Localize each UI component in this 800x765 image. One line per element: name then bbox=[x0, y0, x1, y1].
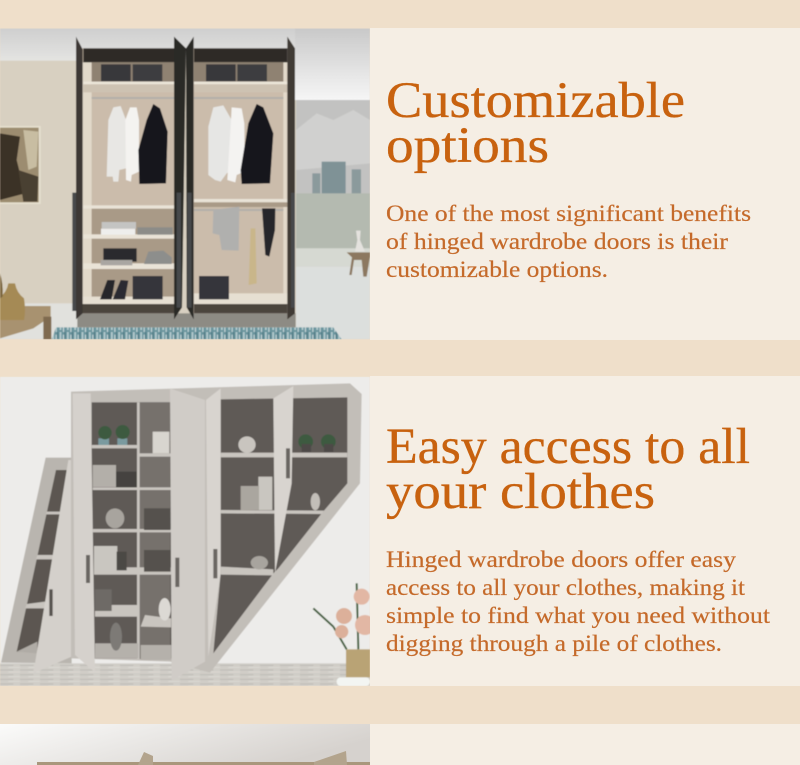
text: easy access description: digging through a pile of clothes. bbox=[386, 631, 722, 656]
heading: Easy access to all your clothes: Easy access to all bbox=[386, 419, 750, 475]
doors bbox=[73, 393, 95, 672]
left slanted cabinet bbox=[1, 458, 72, 663]
painting bbox=[0, 126, 41, 204]
text: easy access description: Hinged wardrobe doors offer easy bbox=[386, 547, 737, 572]
panel: customizable options bbox=[0, 28, 800, 340]
clothes right bbox=[208, 105, 232, 182]
heading: Easy access to all your clothes: your clothes bbox=[386, 464, 655, 520]
rug bbox=[52, 327, 342, 339]
photo: light grey angled under-stairs cabinet bbox=[0, 377, 375, 686]
text: customizable options description bbox=[386, 201, 751, 282]
right unit interior bbox=[193, 48, 287, 313]
text: customizable options description: One of the most significant benefits bbox=[386, 201, 751, 226]
right compartments bbox=[213, 397, 347, 653]
floor bbox=[0, 663, 370, 686]
shelf objects left bbox=[98, 438, 109, 445]
plant and vase bbox=[346, 649, 370, 677]
left compartments bbox=[92, 402, 172, 658]
text panel background bbox=[370, 28, 800, 340]
text: easy access description: access to all your clothes, making it bbox=[386, 575, 746, 600]
heading: Customizable options bbox=[386, 73, 685, 174]
text: easy access description bbox=[386, 547, 771, 656]
main cabinet frame bbox=[71, 383, 362, 673]
text: customizable options description: customizable options. bbox=[386, 257, 608, 282]
text panel background bbox=[370, 376, 800, 686]
text: easy access description: simple to find what you need without bbox=[386, 603, 771, 628]
heading: Easy access to all your clothes bbox=[386, 419, 750, 520]
photo: wall and top of wardrobe bbox=[0, 724, 370, 765]
side table by window bbox=[347, 252, 370, 277]
table and vases bbox=[0, 306, 51, 338]
panel: easy access bbox=[0, 376, 800, 686]
photo: open dark wardrobe with clothes bbox=[0, 28, 370, 339]
text: customizable options description: of hinged wardrobe doors is their bbox=[386, 229, 728, 254]
left unit interior bbox=[82, 48, 174, 206]
panel: third section, cropped at page bottom bbox=[0, 724, 800, 765]
clothes left bbox=[107, 106, 126, 182]
folded items bbox=[102, 222, 136, 229]
text panel background bbox=[370, 724, 800, 765]
heading: Customizable options: options bbox=[386, 118, 549, 174]
window view bbox=[296, 100, 370, 194]
heading: Customizable options: Customizable bbox=[386, 73, 685, 129]
doors bbox=[76, 37, 83, 319]
